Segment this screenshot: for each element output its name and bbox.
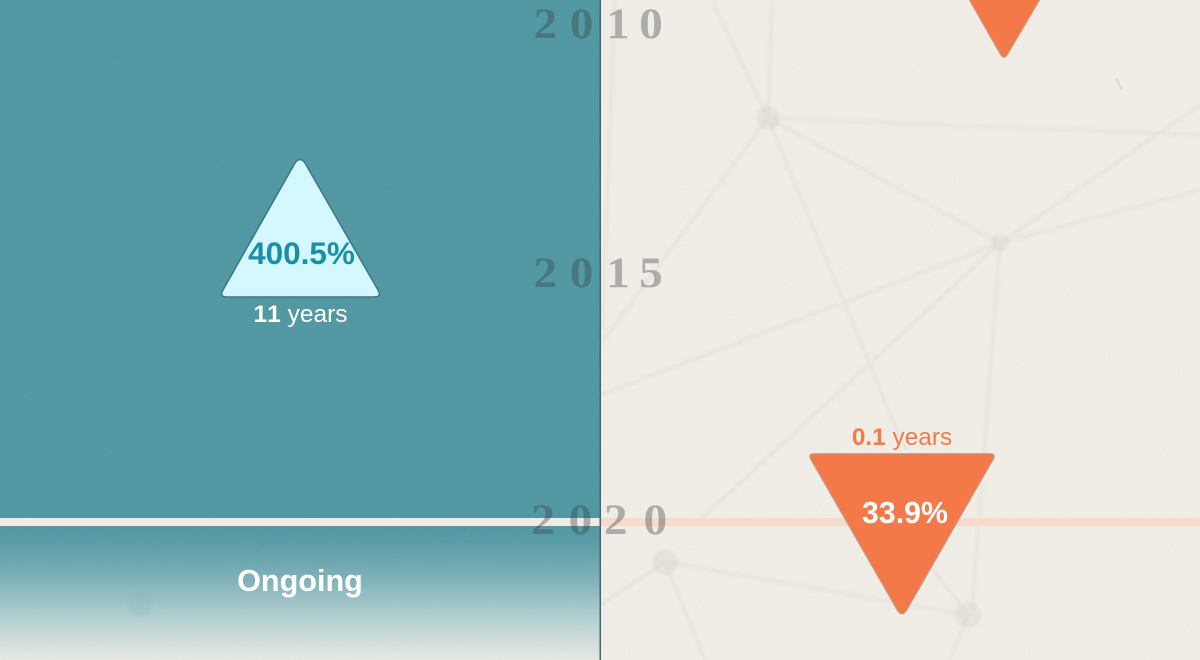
triangle: orange partly cropped at top — [968, 0, 1041, 58]
panel: paper background — [600, 0, 1200, 660]
year label 2010: 0 — [570, 0, 593, 48]
year label 2010: 1 — [606, 0, 630, 48]
duration 11 years: 11 years — [254, 301, 347, 328]
duration 0.1 years: 0.1 years — [852, 424, 952, 451]
year label 2015: 5 — [639, 249, 663, 297]
year label 2010: 0 — [639, 0, 663, 48]
year label 2020: 2 — [531, 496, 555, 544]
divider: white band left — [0, 518, 600, 526]
year label 2010: 2 — [534, 0, 557, 48]
center axis line — [600, 0, 601, 660]
year label 2020: 2 — [604, 496, 628, 544]
label: Ongoing: Ongoing — [237, 564, 363, 598]
callout: 400.5% up triangle — [222, 160, 379, 328]
year label 2020: 0 — [644, 496, 667, 544]
speck on paper — [1116, 78, 1122, 90]
value 400.5%: 400.5% — [248, 235, 355, 271]
year label 2020: 0 — [569, 496, 592, 544]
divider: orange band right — [600, 518, 1200, 526]
value 33.9%: 33.9% — [862, 497, 948, 530]
icon: orange down triangle — [810, 454, 994, 614]
panel: teal left column — [0, 0, 600, 660]
icon: light up triangle — [222, 160, 379, 297]
year label 2015: 0 — [570, 249, 593, 297]
year label 2015: 1 — [606, 249, 630, 297]
year label 2015: 2 — [534, 249, 557, 297]
callout: 33.9% down triangle — [810, 424, 994, 614]
